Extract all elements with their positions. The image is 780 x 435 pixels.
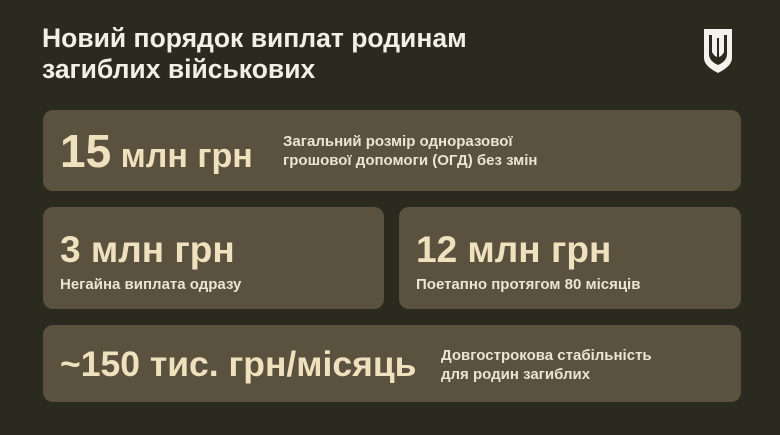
- description: грошової допомоги (ОГД) без змін: [283, 152, 538, 169]
- panel: 12 million: [399, 207, 741, 309]
- description: [441, 347, 652, 383]
- number: ~150 тис. грн/місяць: ~150 тис. грн/місяць: [60, 344, 417, 384]
- panel: monthly: [43, 325, 741, 402]
- description: для родин загиблих: [441, 366, 590, 383]
- number: 3 млн грн: 3 млн грн: [60, 229, 235, 270]
- title: Новий порядок виплат родинам: [42, 23, 467, 53]
- panel: 3 million: [43, 207, 384, 309]
- title: загиблих військових: [42, 54, 315, 84]
- description: Довгострокова стабільність: [441, 347, 652, 364]
- icon: shield trident: [704, 29, 732, 73]
- description: [283, 133, 538, 169]
- description: Поетапно протягом 80 місяців: [416, 276, 640, 293]
- number: 15 млн грн: 15 млн грн: [60, 125, 253, 177]
- title: [42, 23, 467, 84]
- description: Негайна виплата одразу: [60, 276, 241, 293]
- description: Загальний розмір одноразової: [283, 133, 513, 150]
- panel: 15 million: [43, 110, 741, 191]
- number: 12 млн грн: 12 млн грн: [416, 229, 611, 270]
